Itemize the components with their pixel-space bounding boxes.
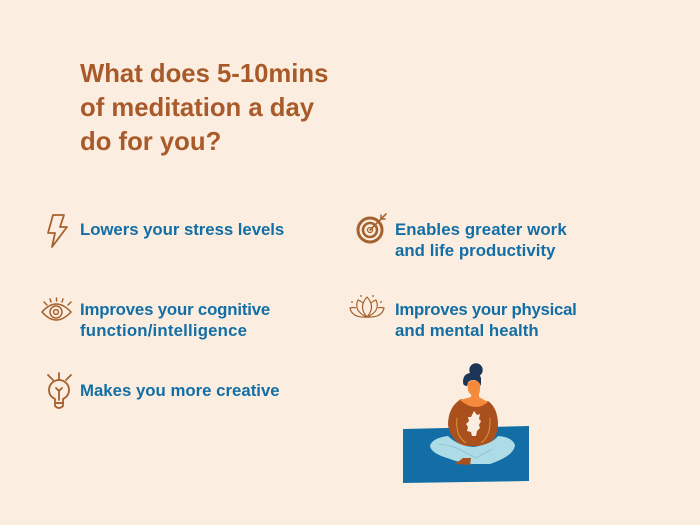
text: cognitive function: function/intelligence <box>80 321 247 340</box>
text: physical and mental health <box>395 300 577 340</box>
neck and shoulders <box>460 390 488 407</box>
arm lines <box>457 418 490 443</box>
title: do for you? <box>80 128 221 156</box>
text: cognitive function: Improves your cognitive <box>80 300 270 319</box>
hair <box>463 373 481 386</box>
text: lowers stress: Lowers your stress levels <box>80 220 284 239</box>
icon: lightning bolt <box>48 215 67 247</box>
icon: eye <box>42 298 71 320</box>
hair bun <box>469 363 483 377</box>
text: work productivity: Enables greater work <box>395 220 567 239</box>
title: What does 5-10mins <box>80 60 328 88</box>
leaf <box>466 411 481 436</box>
icon: lotus <box>350 296 384 317</box>
text: work productivity: and life productivity <box>395 241 556 260</box>
foot <box>455 458 471 465</box>
sweater <box>448 399 498 446</box>
illustration: meditating woman <box>403 363 529 483</box>
yoga mat <box>403 426 529 483</box>
text: work productivity <box>395 220 567 260</box>
text: physical and mental health: and mental health <box>395 321 539 340</box>
icon: light bulb <box>48 373 71 408</box>
text: cognitive function <box>80 300 270 340</box>
face <box>467 379 480 396</box>
text: physical and mental health: Improves your physical <box>395 300 577 319</box>
text: creativity: Makes you more creative <box>80 381 280 400</box>
title: of meditation a day <box>80 94 314 122</box>
legs <box>430 436 515 464</box>
leg crease <box>438 444 492 458</box>
title <box>80 60 328 156</box>
icon: target <box>358 214 386 242</box>
